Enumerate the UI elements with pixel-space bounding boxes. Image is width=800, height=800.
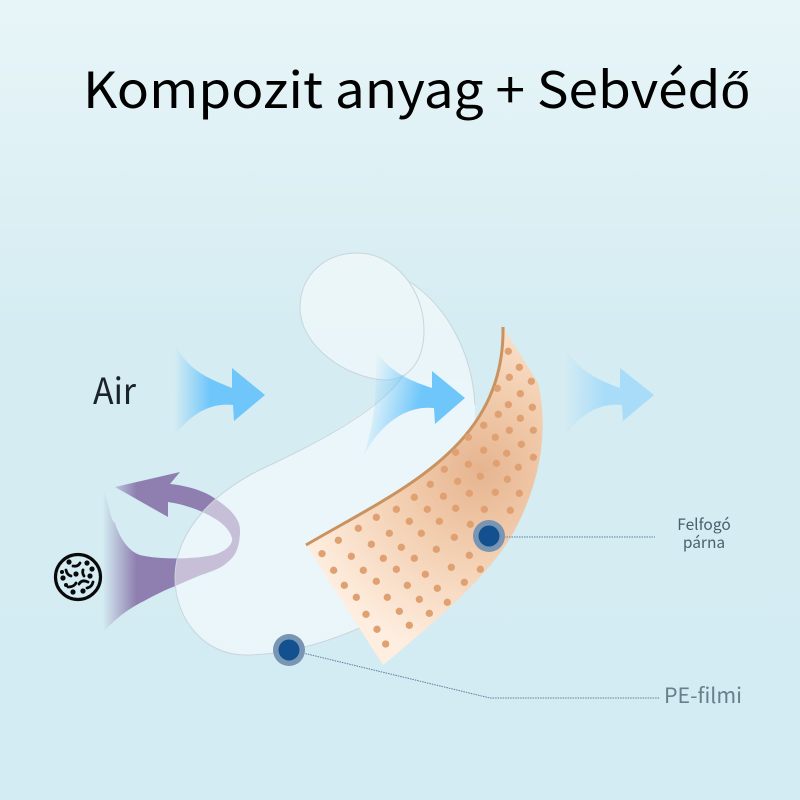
arrow: bacteria blocked (purple) <box>103 472 240 633</box>
label: PE-filmi: PE-filmi <box>664 680 742 710</box>
pad top edge <box>306 327 503 545</box>
panel: PE film <box>175 253 475 655</box>
leader line: pad <box>504 536 655 538</box>
label: Felfogó párna: párna <box>683 531 725 553</box>
marker: pad <box>473 520 505 552</box>
label: Felfogó párna <box>677 513 731 553</box>
arrow: air through film <box>364 350 465 455</box>
panel: absorbent pad <box>306 327 543 665</box>
pad perforations <box>318 348 537 648</box>
film outlines <box>175 253 475 655</box>
icon: bacteria <box>56 554 100 600</box>
arrow: air exiting <box>565 348 654 435</box>
arrow: air entering <box>175 345 265 435</box>
title: Kompozit anyag + Sebvédő <box>83 51 750 123</box>
leader line: film <box>303 653 660 698</box>
marker: film <box>273 634 305 666</box>
label: Felfogó párna: Felfogó <box>677 513 731 535</box>
label: Air: Air <box>93 363 137 415</box>
